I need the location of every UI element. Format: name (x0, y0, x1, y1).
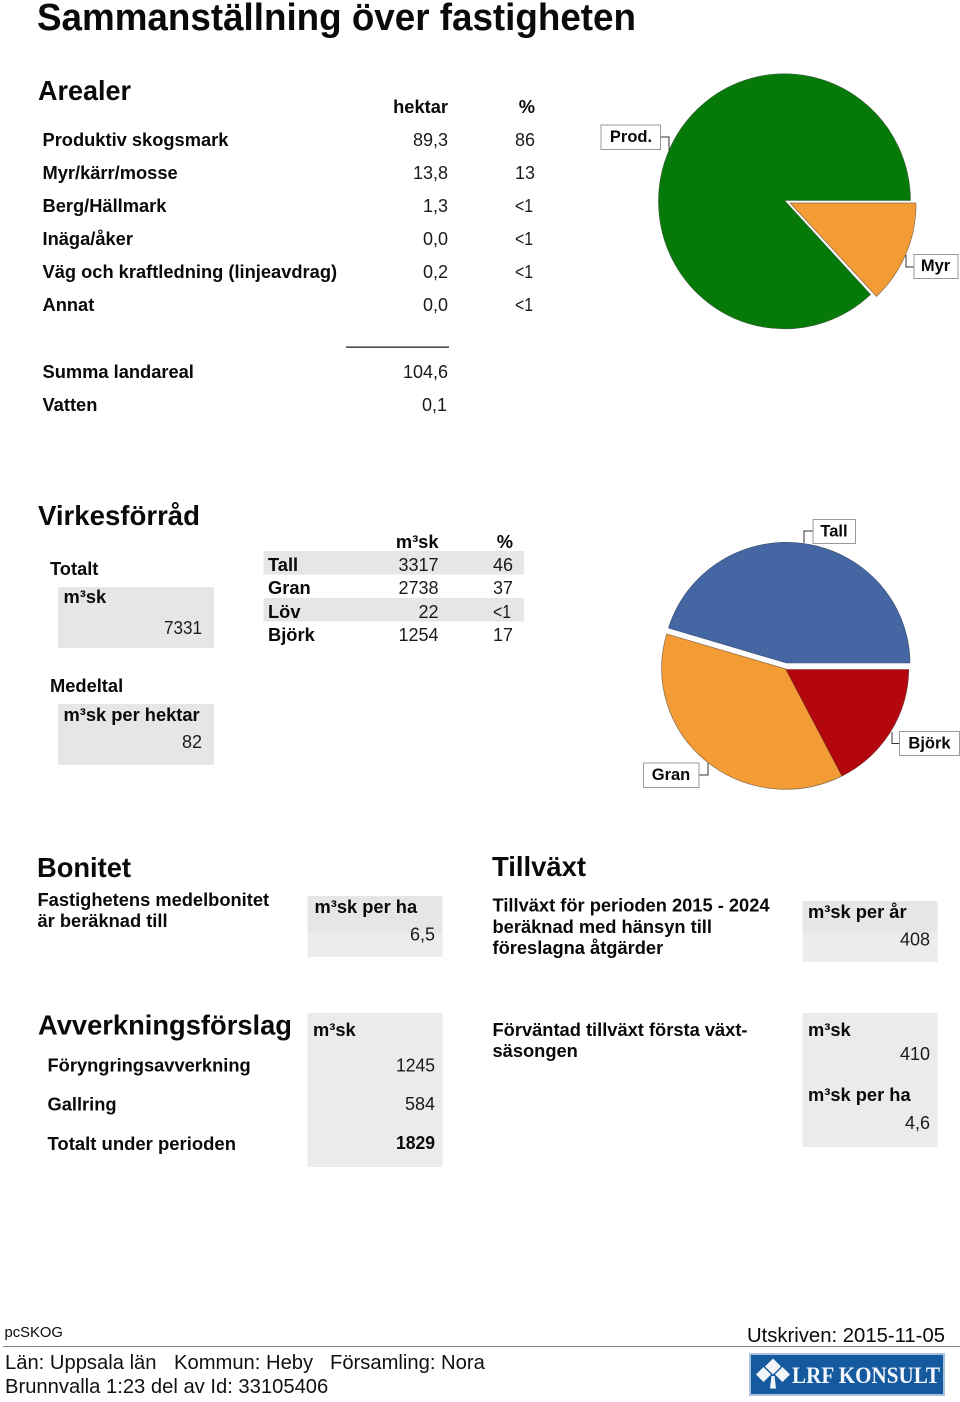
species table: 1254 (398, 625, 438, 645)
table rows: land use: 0,0 (423, 229, 448, 249)
table rows: land use: <1 (515, 196, 533, 216)
Medeltal block: m³sk per hektar (64, 704, 200, 725)
value box: expected growth: m³sk (808, 1019, 852, 1040)
table rows: land use: <1 (515, 295, 533, 315)
panel: Tillväxt (492, 851, 938, 962)
table rows: land use: Produktiv skogsmark (42, 129, 229, 150)
species table: <1 (493, 602, 511, 622)
text: Bonitet description: är beräknad till (38, 910, 168, 931)
label: Gran (644, 763, 708, 788)
label: Björk (892, 732, 960, 756)
species table: 37 (493, 578, 513, 598)
table rows: totals: Vatten (42, 394, 97, 415)
label: Björk: Björk (908, 734, 951, 752)
species table: m³sk (396, 531, 439, 552)
property location: Kommun: Heby (174, 1352, 314, 1374)
heading: Virkesförråd: Virkesförråd (38, 500, 200, 531)
text: Förväntad tillväxt description: säsongen (492, 1040, 578, 1061)
table rows: land use: <1 (515, 262, 533, 282)
Medeltal block: 82 (182, 732, 202, 752)
footer rule (3, 1346, 960, 1347)
table rows: land use: 86 (515, 130, 535, 150)
property location: Församling: Nora (330, 1352, 486, 1374)
slice: Prod. (659, 74, 910, 329)
row: Gallring: Gallring (48, 1094, 117, 1114)
panel: Förväntad tillväxt (492, 1013, 938, 1147)
footer (3, 1325, 960, 1398)
Totalt block: 7331 (164, 618, 202, 638)
property location (5, 1352, 486, 1398)
logo: LRF Konsult: LRF KONSULT (792, 1363, 940, 1389)
heading: Avverkningsförslag: Avverkningsförslag (38, 1010, 292, 1040)
label: Myr: Myr (921, 257, 951, 275)
table rows: land use: 13 (515, 163, 535, 183)
text: Tillväxt description: Tillväxt för perioden 2015 - 2024 (492, 894, 770, 916)
slice: Gran (662, 634, 842, 789)
text: Tillväxt description: föreslagna åtgärder (492, 937, 663, 958)
species table: 22 (418, 602, 438, 622)
Totalt block (50, 558, 214, 648)
heading: Tillväxt: Tillväxt (492, 851, 586, 882)
label: Gran: Gran (652, 766, 690, 784)
table rows: totals: 0,1 (422, 395, 447, 415)
Totalt block: m³sk (64, 586, 107, 607)
table rows: totals: 104,6 (403, 362, 448, 382)
slice: Björk (786, 670, 909, 776)
label: Tall: Tall (820, 522, 848, 540)
table header: Arealer: hektar (393, 96, 448, 117)
value box background (308, 1013, 442, 1167)
value box: m³sk per år: 408 (900, 930, 930, 950)
Medeltal block (50, 675, 214, 765)
heading: Bonitet: Bonitet (37, 852, 131, 883)
row: Gallring: 584 (405, 1094, 435, 1114)
text: Tillväxt description: beräknad med hänsyn till (492, 916, 712, 937)
panel: Bonitet (37, 852, 442, 957)
table rows: land use: <1 (515, 229, 533, 249)
text: Bonitet description: Fastighetens medelbonitet (38, 889, 269, 910)
text: Tillväxt description (492, 894, 770, 958)
table rows: totals: Summa landareal (42, 361, 194, 382)
value box: m³sk per ha: m³sk per ha (314, 896, 418, 917)
table header: Arealer (393, 96, 535, 117)
table rows: land use: Väg och kraftledning (linjeavdrag) (42, 261, 337, 282)
Totalt block: Totalt (50, 558, 98, 579)
species table: 3317 (398, 555, 438, 575)
property location: Brunnvalla 1:23 del av Id: 33105406 (5, 1376, 328, 1398)
species table: % (497, 531, 513, 552)
row: Föryngringsavverkning: Föryngringsavverkning (48, 1054, 251, 1076)
pie chart: Virkesförråd (644, 520, 960, 789)
label: Prod.: Prod. (610, 128, 652, 146)
table rows: land use: Berg/Hällmark (42, 195, 167, 216)
panel: Avverkningsförslag (38, 1010, 442, 1167)
row: Totalt under perioden: 1829 (396, 1132, 435, 1153)
text: Förväntad tillväxt description: Förväntad tillväxt första växt- (492, 1019, 748, 1040)
table rows: land use: 13,8 (413, 163, 448, 183)
label: Myr (906, 254, 958, 278)
property location: Län: Uppsala län (5, 1352, 157, 1374)
label: Prod. (601, 125, 669, 150)
table rows: land use: 1,3 (423, 196, 448, 216)
slice: Tall (668, 542, 910, 663)
software name: pcSKOG (4, 1325, 63, 1341)
sum line (346, 346, 449, 348)
value box: expected growth: 410 (900, 1044, 930, 1064)
label: Tall (804, 520, 856, 544)
slice: Myr (790, 203, 916, 296)
text: Förväntad tillväxt description (492, 1019, 748, 1061)
logo: LRF Konsult (749, 1353, 945, 1396)
panel: Virkesförråd (38, 500, 524, 765)
table header: Arealer: % (519, 96, 535, 117)
table rows: land use: 0,2 (423, 262, 448, 282)
species table: 2738 (398, 578, 438, 598)
row: Gallring (48, 1094, 435, 1114)
table rows: totals (42, 361, 448, 415)
species table: Tall (268, 554, 298, 575)
print date: Utskriven: 2015-11-05 (747, 1325, 945, 1347)
panel: Arealer (38, 75, 535, 415)
table rows: land use (42, 129, 535, 315)
row: Föryngringsavverkning: 1245 (396, 1056, 435, 1076)
species table: 17 (493, 625, 513, 645)
species table: 46 (493, 555, 513, 575)
table rows: land use: 89,3 (413, 130, 448, 150)
species table: Björk (268, 624, 316, 645)
value box: m³sk per ha: 6,5 (410, 924, 435, 944)
value box: m³sk per ha (308, 896, 442, 957)
column header: m³sk (313, 1019, 357, 1040)
value box: m³sk per år: m³sk per år (808, 901, 907, 922)
icon: LRF diamond (756, 1358, 790, 1388)
row: Föryngringsavverkning (48, 1054, 435, 1076)
table rows: land use: Myr/kärr/mosse (42, 162, 178, 183)
pie chart: Arealer (601, 74, 958, 329)
row: Totalt under perioden: Totalt under perioden (48, 1133, 236, 1154)
value box: m³sk per år (802, 901, 938, 962)
species table: Löv (268, 601, 301, 622)
Medeltal block: Medeltal (50, 675, 123, 696)
table rows: land use: Inäga/åker (42, 228, 133, 249)
species table: Gran (268, 577, 311, 598)
value box: expected growth: m³sk per ha (808, 1084, 911, 1105)
table rows: land use: 0,0 (423, 295, 448, 315)
value box: expected growth: 4,6 (905, 1113, 930, 1133)
text: Bonitet description (38, 889, 269, 931)
species table (264, 531, 524, 645)
value box: expected growth (802, 1013, 938, 1147)
table rows: land use: Annat (42, 294, 94, 315)
row: Totalt under perioden (48, 1132, 435, 1154)
heading: Arealer: Arealer (38, 75, 131, 106)
